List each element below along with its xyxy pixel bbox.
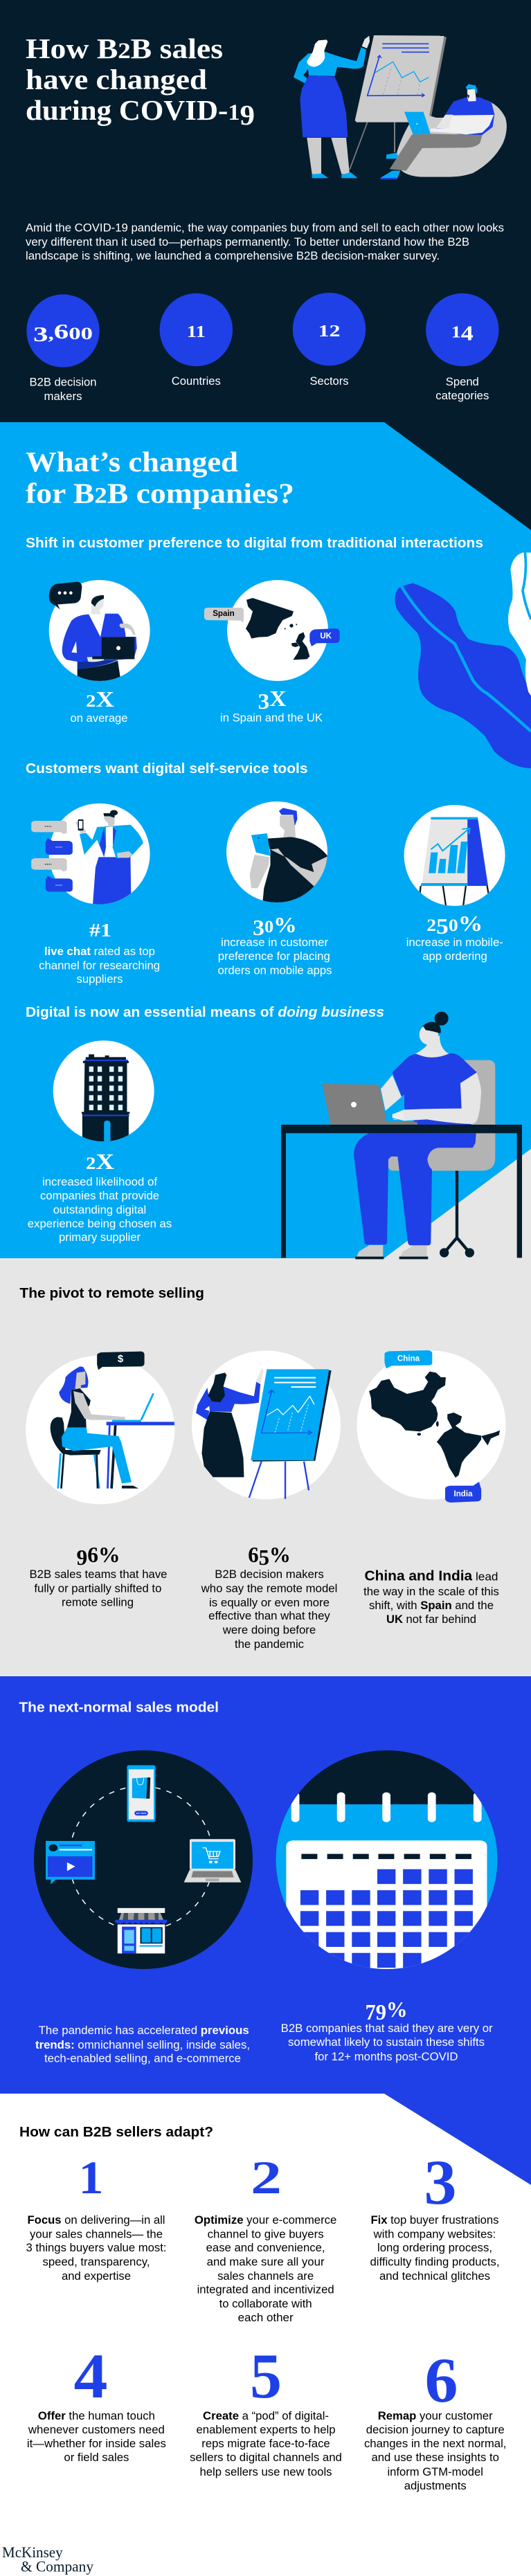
stat: 65%: who say the remote model <box>201 1581 337 1595</box>
step 2: to collaborate with <box>219 2297 312 2310</box>
illustration: office building <box>53 1040 154 1143</box>
callout: China and India lead <box>363 1568 499 1626</box>
step 6 <box>364 2345 506 2492</box>
intro paragraph: very different than it used to—perhaps permanently. To better understand how the B2B <box>26 235 469 248</box>
illustration: woman at laptop with dollar bubble <box>26 1352 174 1505</box>
step 3: 3 <box>424 2147 457 2217</box>
illustration: woman on phone with chat bubbles <box>31 804 150 907</box>
panel: intro header <box>0 0 531 536</box>
step 2: sales channels are <box>217 2269 314 2283</box>
stat: 30% mobile apps: 0 <box>264 918 273 936</box>
stat: 30% mobile apps: preference for placing <box>218 950 330 963</box>
stat: 65%: were doing before <box>222 1624 316 1636</box>
illustration: map of Spain and the UK with labels <box>204 580 340 681</box>
stat: 30% mobile apps: 3 <box>253 915 264 940</box>
step 1: and expertise <box>62 2269 131 2283</box>
stat: 2X primary supplier: companies that provide <box>40 1189 159 1202</box>
stat: 65%: B2B decision makers <box>215 1568 324 1581</box>
stat: 96% <box>29 1542 168 1609</box>
stat: 2X on average <box>71 687 127 725</box>
title: How B 2B sales <box>26 33 223 64</box>
stat: 3,600 B2B decision makers: B2B decision <box>29 375 97 389</box>
illustration: map of Spain and the UK with labels: UK <box>320 632 332 641</box>
step 4: 4 <box>73 2341 108 2411</box>
illustration: map of China and India with labels: India <box>453 1489 473 1498</box>
subheading: digital self-service tools: Customers want digital self-service tools <box>26 761 307 777</box>
stat: 79%: 79 <box>366 1999 386 2024</box>
callout: China and India lead: UK not far behind <box>386 1613 476 1626</box>
step 6: Remap your customer <box>378 2409 493 2422</box>
stat: #1 live chat: suppliers <box>76 972 123 986</box>
stat: 65%: 6 <box>248 1542 259 1567</box>
stat: 30% mobile apps: % <box>273 912 296 937</box>
step 6: changes in the next normal, <box>364 2437 506 2450</box>
stat: 12 sectors: Sectors <box>310 374 349 388</box>
stat: 12 sectors <box>293 293 366 388</box>
stat: 3X in Spain and the UK: X <box>269 686 287 711</box>
stat: 250% mobile-app ordering: 5 <box>436 914 449 938</box>
stat: 250% mobile-app ordering: % <box>458 911 480 936</box>
decorative organic shapes <box>395 552 531 768</box>
callout: China and India lead: shift, with Spain and the <box>369 1599 494 1612</box>
stat: 30% mobile apps: orders on mobile apps <box>217 964 332 977</box>
step 2: ease and convenience, <box>206 2241 325 2254</box>
illustration: map of China and India with labels <box>357 1350 505 1503</box>
stat: #1 live chat: channel for researching <box>39 959 160 972</box>
stat: 65%: effective than what they <box>208 1609 330 1622</box>
stat: 79%: B2B companies that said they are very or <box>281 2022 493 2035</box>
step 2 <box>195 2151 336 2324</box>
stat: 14 spend categories: 4 <box>461 321 474 345</box>
heading: how can B2B sellers adapt: How can B2B sellers adapt? <box>19 2125 213 2140</box>
stat: 3X in Spain and the UK: 3 <box>258 689 269 714</box>
step 4: whenever customers need <box>28 2423 165 2436</box>
stat: 65%: is equally or even more <box>209 1596 330 1609</box>
callout: China and India lead: China and India lead <box>364 1568 498 1584</box>
stat: 96%: % <box>98 1542 120 1567</box>
title: have changed <box>26 64 207 96</box>
stat: 79%: for 12+ months post-COVID <box>314 2050 458 2063</box>
stat: 250% mobile-app ordering: 2 <box>426 916 436 935</box>
step 2: each other <box>238 2311 294 2324</box>
step 3: long ordering process, <box>377 2241 492 2254</box>
stat: 65%: 5 <box>259 1545 269 1570</box>
stat: 3,600 B2B decision makers: , <box>48 325 54 343</box>
stat: 2X primary supplier: outstanding digital <box>53 1204 146 1217</box>
step 1 <box>26 2151 166 2283</box>
step 5: help sellers use new tools <box>199 2465 332 2478</box>
illustration: woman working at desk <box>281 1012 522 1259</box>
stat: 96%: fully or partially shifted to <box>34 1581 161 1595</box>
text: previous trends <box>35 2024 250 2065</box>
step 2: channel to give buyers <box>208 2228 324 2241</box>
step 2: and make sure all your <box>207 2256 325 2269</box>
text: previous trends: The pandemic has accelerated previous <box>39 2024 249 2037</box>
step 5: reps migrate face-to-face <box>201 2437 330 2450</box>
stat: 65%: % <box>269 1542 291 1567</box>
step 3: and technical glitches <box>379 2269 490 2283</box>
stat: 79%: % <box>386 1997 407 2022</box>
step 3 <box>370 2147 500 2283</box>
illustration: presenter at blue flip chart <box>192 1351 341 1499</box>
stat: 96%: 9 <box>76 1545 87 1570</box>
step 1: 3 things buyers value most: <box>26 2241 166 2254</box>
stat: 12 sectors: 12 <box>318 323 341 341</box>
stat: #1 live chat <box>39 920 160 986</box>
illustration: man with tablet <box>226 801 327 905</box>
intro paragraph: landscape is shifting, we launched a comprehensive B2B decision-maker survey. <box>26 249 440 262</box>
stat: 14 spend categories: Spend <box>446 375 479 388</box>
stat: 3X in Spain and the UK: in Spain and the UK <box>220 711 323 725</box>
logo: McKinsey & Company <box>2 2543 93 2575</box>
step 4: or field sales <box>64 2451 129 2464</box>
step 1: your sales channels— the <box>30 2228 163 2241</box>
stat: 14 spend categories <box>426 293 498 402</box>
stat: 3,600 B2B decision makers: 3 <box>33 322 48 346</box>
step 6: 6 <box>425 2345 458 2415</box>
stat: 250% mobile-app ordering: increase in mobile- <box>406 936 503 949</box>
stat: 2X primary supplier <box>28 1149 172 1244</box>
step 2: integrated and incentivized <box>197 2283 334 2296</box>
stat: 30% mobile apps: increase in customer <box>221 936 329 949</box>
heading: what's changed <box>26 446 294 509</box>
stat: 65% <box>201 1542 337 1651</box>
step 6: decision journey to capture <box>366 2423 505 2436</box>
step 4 <box>27 2341 166 2464</box>
stat: 3,600 B2B decision makers: 00 <box>69 325 93 343</box>
panel: what's changed <box>0 422 531 1258</box>
stat: 2X primary supplier: primary supplier <box>59 1231 141 1244</box>
stat: 96%: remote selling <box>62 1596 134 1609</box>
text: previous trends: trends: omnichannel selling, inside sales, <box>35 2038 250 2051</box>
illustration: omnichannel circle <box>34 1750 253 1969</box>
stat: 14 spend categories: 1 <box>451 324 460 342</box>
stat: 250% mobile-app ordering: 0 <box>449 916 458 935</box>
illustration: man with laptop and speech bubble <box>49 580 150 683</box>
intro paragraph: Amid the COVID-19 pandemic, the way companies buy from and sell to each other now looks <box>26 221 504 234</box>
panel: next-normal sales model <box>0 1676 531 2185</box>
title <box>26 33 255 131</box>
stat: 2X on average: 2X <box>86 687 114 711</box>
step 4: Offer the human touch <box>38 2409 155 2422</box>
stat: 79% <box>281 1997 493 2063</box>
title: 9 <box>240 99 255 131</box>
heading: what's changed: for B 2B companies? <box>26 478 294 509</box>
callout: China and India lead: the way in the scale of this <box>363 1585 499 1598</box>
stat: 2X primary supplier: increased likelihood of <box>42 1175 157 1188</box>
step 1: 1 <box>79 2151 104 2204</box>
logo: McKinsey & Company: & Company <box>21 2558 93 2575</box>
subheading: shift in customer preference: Shift in customer preference to digital from traditional interactions <box>26 536 483 551</box>
step 4: it—whether for inside sales <box>27 2437 166 2450</box>
step 2: 2 <box>251 2151 282 2204</box>
stat: 30% mobile apps <box>217 912 332 977</box>
stat: 14 spend categories: categories <box>435 389 489 402</box>
stat: 250% mobile-app ordering: app ordering <box>422 950 487 963</box>
step 6: adjustments <box>404 2479 467 2492</box>
step 5: 5 <box>250 2341 282 2411</box>
illustration: map of Spain and the UK with labels: Spain <box>213 609 235 618</box>
heading: the pivot to remote selling: The pivot to remote selling <box>19 1286 204 1301</box>
step 3: with company websites: <box>373 2228 496 2241</box>
icon label: buy now: BUY NOW <box>136 1812 146 1815</box>
stat: 3,600 B2B decision makers <box>26 294 100 403</box>
stat: 11 countries: Countries <box>172 374 221 388</box>
stat: 11 countries: 11 <box>187 323 206 341</box>
stat: 3,600 B2B decision makers: makers <box>44 390 82 403</box>
step 2: Optimize your e-commerce <box>195 2213 336 2226</box>
stat: 79%: somewhat likely to sustain these shifts <box>288 2035 485 2049</box>
illustration: map of China and India with labels: China <box>397 1354 420 1363</box>
heading: what's changed: What’s changed <box>26 446 238 478</box>
stat: 2X on average: on average <box>71 711 127 725</box>
step 5: sellers to digital channels and <box>190 2451 342 2464</box>
step 6: inform GTM-model <box>387 2465 483 2478</box>
step 5: enablement experts to help <box>197 2423 335 2436</box>
stat: 96%: 6 <box>87 1542 98 1567</box>
logo: McKinsey & Company: McKinsey <box>2 2543 63 2561</box>
stat: 65%: the pandemic <box>235 1638 304 1651</box>
illustration: woman at laptop with dollar bubble: $ <box>118 1353 124 1365</box>
stat: 11 countries <box>160 293 233 388</box>
step 5: Create a “pod” of digital- <box>203 2409 329 2422</box>
step 5 <box>190 2341 342 2478</box>
stat: #1 live chat: #1 <box>89 920 111 941</box>
title: during COVID- 1 <box>26 94 240 126</box>
heading: the next-normal sales model: The next-normal sales model <box>19 1700 219 1715</box>
icon: storefront <box>115 1908 167 1954</box>
stat: #1 live chat: live chat rated as top <box>44 945 155 958</box>
panel: how can B2B sellers adapt <box>2 2125 506 2575</box>
text: previous trends: tech-enabled selling, and e-commerce <box>44 2051 241 2065</box>
step 1: Focus on delivering—in all <box>28 2213 165 2226</box>
intro paragraph <box>26 221 504 262</box>
icon: laptop with shopping cart <box>184 1839 241 1883</box>
illustration: presenter at flip chart and man with laptop <box>294 35 507 179</box>
stat: 3X in Spain and the UK <box>220 686 323 725</box>
icon: video post <box>46 1841 95 1884</box>
stat: 250% mobile-app ordering <box>406 911 503 963</box>
step 6: and use these insights to <box>371 2451 499 2464</box>
stat: 96%: B2B sales teams that have <box>29 1568 168 1581</box>
step 1: speed, transparency, <box>43 2256 150 2269</box>
subheading: digital is essential: Digital is now an essential means of doing business <box>26 1005 384 1020</box>
stat: 2X primary supplier: experience being chosen as <box>28 1217 172 1230</box>
step 3: difficulty finding products, <box>370 2256 500 2269</box>
illustration: flip chart with rising bars <box>404 805 505 906</box>
panel: pivot to remote selling <box>0 1012 531 1677</box>
stat: 3,600 B2B decision makers: 6 <box>54 319 69 343</box>
icon: smartphone with shopping bag <box>127 1765 156 1822</box>
stat: 2X primary supplier: 2X <box>86 1149 114 1174</box>
illustration: calendar circle <box>271 1749 501 1975</box>
step 3: Fix top buyer frustrations <box>371 2213 498 2226</box>
